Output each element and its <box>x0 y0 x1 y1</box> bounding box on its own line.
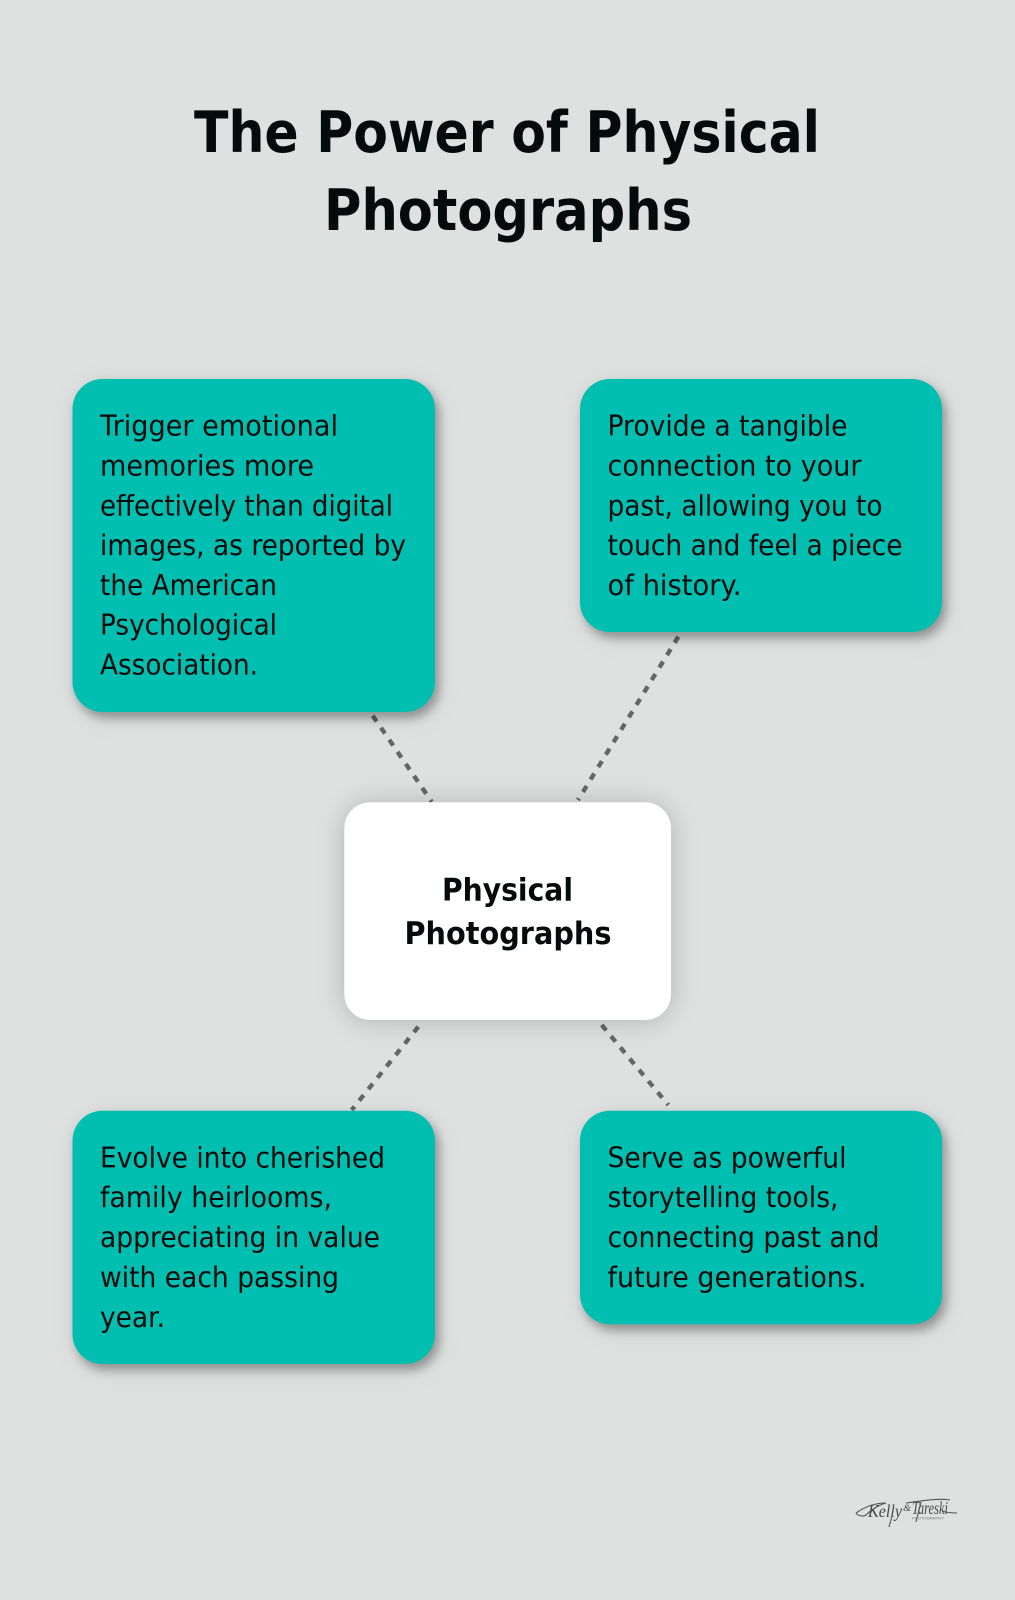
panel text <box>608 410 902 602</box>
signature logo: Kelly <box>867 1501 902 1521</box>
signature logo: & <box>903 1503 911 1513</box>
connector: center to top-right card <box>578 637 678 800</box>
panel background <box>580 1111 942 1324</box>
panel text: the American <box>100 569 277 602</box>
panel text: Physical <box>442 872 573 908</box>
panel text: Provide a tangible <box>608 410 848 443</box>
panel text: year. <box>100 1301 165 1334</box>
panel background <box>72 379 435 712</box>
panel text: future generations. <box>608 1261 866 1294</box>
panel text: appreciating in value <box>100 1221 380 1254</box>
panel text <box>404 872 612 952</box>
signature logo <box>856 1498 957 1527</box>
panel: central topic <box>344 802 671 1020</box>
panel text: connection to your <box>608 450 862 482</box>
panel text: family heirlooms, <box>100 1181 332 1214</box>
panel text: images, as reported by <box>100 529 406 562</box>
panel text: Photographs <box>404 916 612 952</box>
panel text: with each passing <box>100 1261 339 1294</box>
panel text: effectively than digital <box>100 489 393 522</box>
connector: center to bottom-right card <box>602 1025 668 1105</box>
panel: emotional memories <box>72 379 435 712</box>
panel text: connecting past and <box>608 1221 880 1254</box>
signature logo: PHOTOGRAPHY <box>912 1516 945 1520</box>
panel text: of history. <box>608 569 742 602</box>
title: Photographs <box>324 178 692 244</box>
panel: family heirlooms <box>72 1111 435 1364</box>
panel text: Serve as powerful <box>608 1141 846 1174</box>
title: The Power of Physical <box>194 100 820 166</box>
panel text <box>608 1141 880 1294</box>
title <box>194 100 820 244</box>
panel text: storytelling tools, <box>608 1181 838 1214</box>
panel background <box>344 802 671 1020</box>
panel text: Trigger emotional <box>99 410 338 443</box>
signature logo: Tareski <box>912 1498 948 1518</box>
panel text: touch and feel a piece <box>608 529 902 562</box>
panel text <box>100 1141 385 1334</box>
panel background <box>72 1111 435 1364</box>
panel: storytelling tools <box>580 1111 942 1324</box>
panel text: Association. <box>100 648 258 682</box>
connector: center to top-left card <box>373 716 432 802</box>
panel background <box>580 379 942 632</box>
panel text <box>99 410 406 682</box>
panel text: Psychological <box>100 609 277 642</box>
panel text: memories more <box>100 450 314 482</box>
connector: center to bottom-left card <box>352 1027 418 1110</box>
panel: tangible connection <box>580 379 942 632</box>
panel text: past, allowing you to <box>608 489 882 522</box>
panel text: Evolve into cherished <box>100 1141 385 1174</box>
